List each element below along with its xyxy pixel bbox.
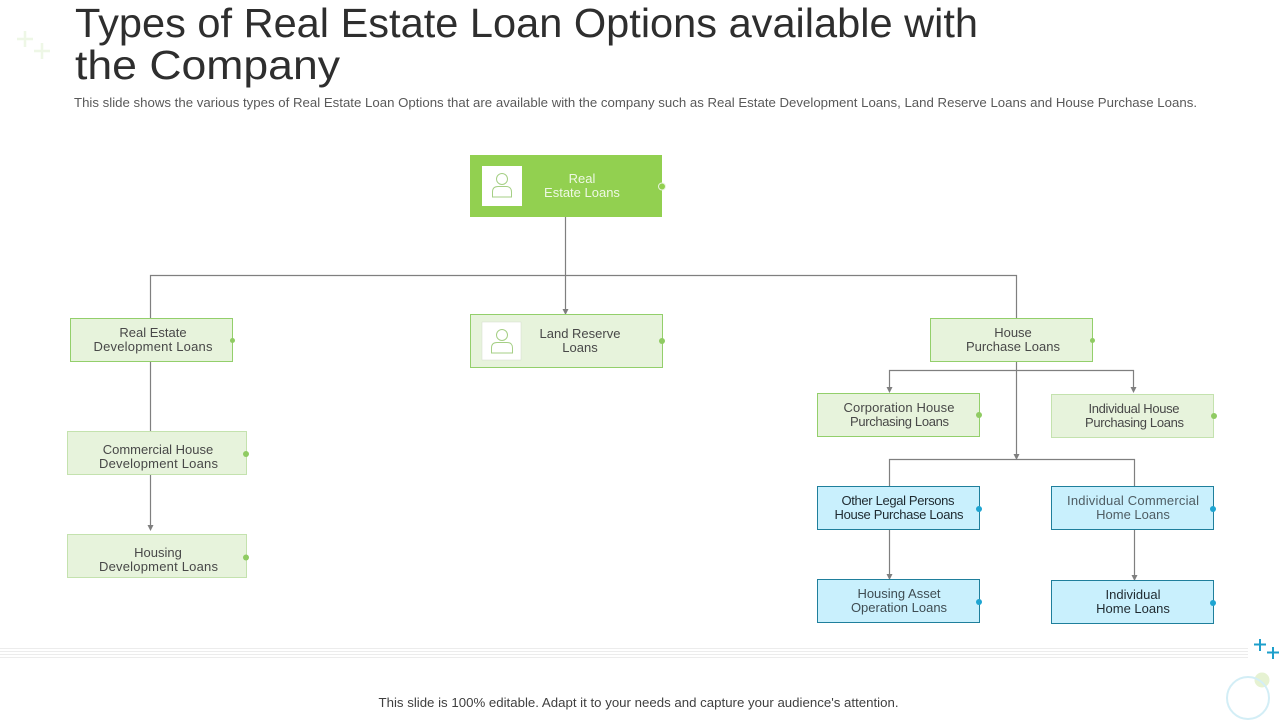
- box: Housing Development Loans: [68, 534, 249, 578]
- box: House Purchase Loans: House: [994, 325, 1032, 340]
- icon: top-left green plus signs: [17, 31, 50, 59]
- box: Housing Development Loans: Development Loans: [99, 559, 218, 574]
- box: House Purchase Loans: Purchase Loans: [966, 339, 1060, 354]
- box: Individual Home Loans: Individual: [1106, 587, 1161, 602]
- box: Real Estate Development Loans: Real Estate: [119, 325, 187, 340]
- box: Other Legal Persons House Purchase Loans: [818, 486, 982, 530]
- title: Types of Real Estate Loan Options available with: [75, 0, 978, 46]
- box: Corporation House Purchasing Loans: [818, 394, 982, 436]
- box: Individual House Purchasing Loans: [1052, 394, 1217, 438]
- box: Land Reserve Loans: Land Reserve: [540, 326, 620, 341]
- title: [75, 0, 978, 88]
- box: Individual Commercial Home Loans: Home Loans: [1096, 507, 1170, 522]
- icon: blue plus signs: [1254, 639, 1279, 659]
- box: Housing Asset Operation Loans: [818, 580, 982, 622]
- box: Real Estate Development Loans: [70, 318, 235, 362]
- box: Real Estate Loans: Estate Loans: [544, 185, 620, 200]
- box: Commercial House Development Loans: [68, 432, 249, 474]
- footer stripes: [0, 648, 1248, 658]
- box: Corporation House Purchasing Loans: Purchasing Loans: [850, 414, 950, 429]
- box: Other Legal Persons House Purchase Loans: House Purchase Loans: [834, 507, 964, 522]
- box: House Purchase Loans: [930, 318, 1095, 362]
- box: Individual House Purchasing Loans: Individual House: [1088, 401, 1180, 416]
- box: Commercial House Development Loans: Development Loans: [99, 456, 218, 471]
- box: Real Estate Loans: [470, 155, 666, 217]
- box: Housing Development Loans: Housing: [134, 545, 182, 560]
- connector lines: [148, 217, 1138, 581]
- box: Real Estate Development Loans: Development Loans: [94, 339, 213, 354]
- footer note: This slide is 100% editable. Adapt it to your needs and capture your audience's attention.: [378, 695, 898, 710]
- box: Individual Home Loans: [1052, 580, 1216, 624]
- title: the Company: [75, 42, 341, 88]
- box: Housing Asset Operation Loans: Operation Loans: [851, 600, 948, 615]
- box: Individual Commercial Home Loans: Individual Commercial: [1067, 493, 1199, 508]
- box: Individual Commercial Home Loans: [1052, 486, 1216, 530]
- box: Corporation House Purchasing Loans: Corporation House: [844, 400, 954, 415]
- box: Real Estate Loans: Real: [569, 171, 595, 186]
- box: Individual Home Loans: Home Loans: [1096, 601, 1170, 616]
- subtitle: This slide shows the various types of Real Estate Loan Options that are available with the company such as Real Estate Development Loans, Land Reserve Loans and House Purchase Loans.: [74, 95, 1197, 110]
- box: Individual House Purchasing Loans: Purchasing Loans: [1085, 415, 1184, 430]
- box: Land Reserve Loans: [470, 314, 665, 368]
- box: Commercial House Development Loans: Commercial House: [103, 442, 213, 457]
- box: Land Reserve Loans: Loans: [562, 340, 598, 355]
- icon: decorative circles: [1227, 672, 1270, 719]
- icon: person in white tile: [482, 322, 521, 360]
- icon: person in white tile: [482, 166, 522, 206]
- box: Housing Asset Operation Loans: Housing Asset: [857, 586, 941, 601]
- box: Other Legal Persons House Purchase Loans: Other Legal Persons: [842, 493, 955, 508]
